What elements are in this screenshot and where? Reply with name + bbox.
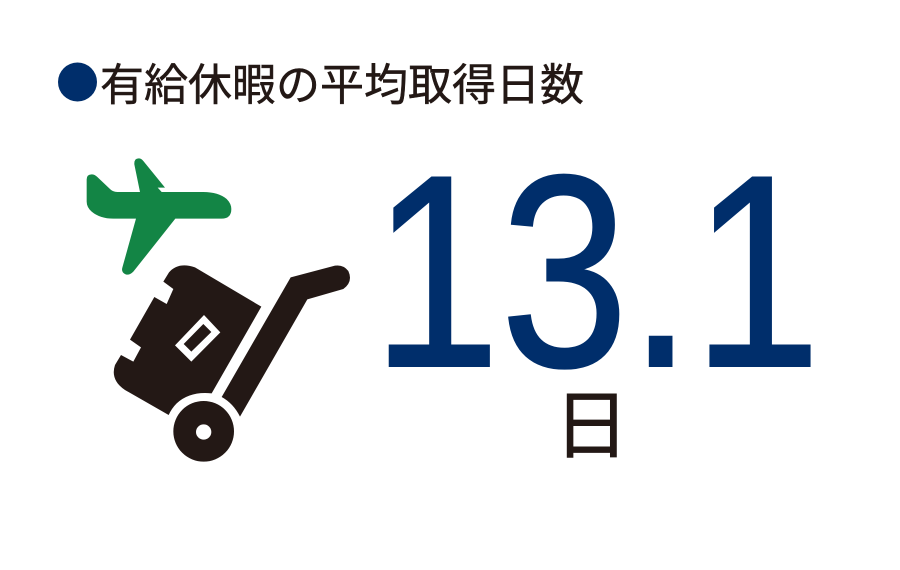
luggage tag xyxy=(175,315,220,362)
value: 13.1: 13.1 xyxy=(372,119,821,425)
heading bullet xyxy=(58,62,97,102)
cart handle xyxy=(222,265,350,417)
title: 有給休暇の平均取得日数 xyxy=(100,61,584,110)
unit: days: 日 xyxy=(554,384,629,468)
suitcase xyxy=(114,265,261,415)
wheel xyxy=(173,401,234,462)
icon: airplane xyxy=(87,158,231,275)
icon: luggage on hand cart xyxy=(114,265,350,462)
